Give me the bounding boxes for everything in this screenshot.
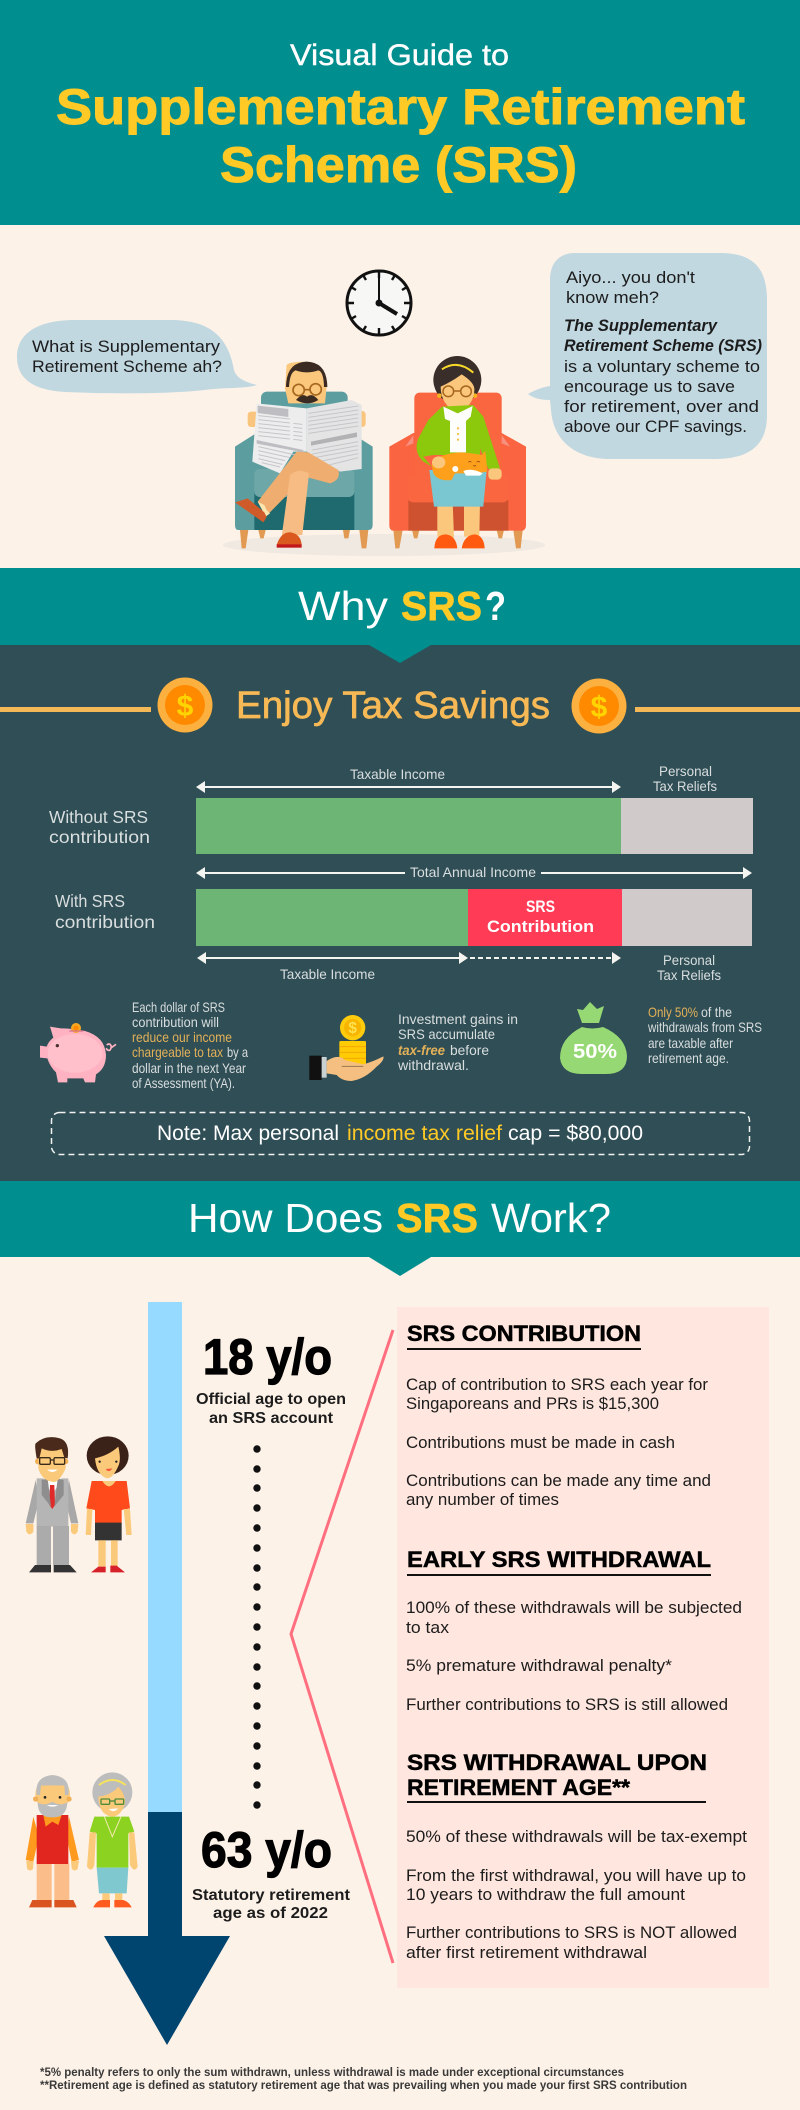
section: early SRS withdrawal: 100% of these withdrawals will be subjected [406,1598,742,1617]
callout: question bubble: What is Supplementary [32,337,221,356]
callout: answer bubble: above our CPF savings. [564,417,747,436]
section: early SRS withdrawal: to tax [406,1618,450,1637]
text: 63 y/o: 63 y/o [201,1822,332,1878]
text: 18 y/o [196,1329,346,1427]
arrow: band pointer [369,645,431,663]
callout: note on relief cap: cap = $80,000 [508,1122,643,1145]
icon: senior couple [26,1772,138,1907]
text: reduce income chargeable to tax: Each dollar of SRS [132,999,225,1015]
chart: income bar with SRS: Taxable Income [280,966,375,982]
text: investment gains tax-free: withdrawal. [397,1057,469,1073]
icon: young couple [26,1436,132,1572]
section: SRS contribution: Cap of contribution to SRS each year for [406,1375,708,1394]
arrow: total annual income [196,864,752,880]
heading band: how does srs work: How Does [188,1195,383,1241]
text: investment gains tax-free: before [450,1042,489,1058]
icon: hand holding gold coins [309,1015,384,1081]
panel: SRS rules [397,1307,769,1988]
heading: enjoy tax savings with coins: Enjoy Tax Savings [236,685,550,727]
chart: income bar without SRS: contribution [49,827,150,847]
text: 18 y/o: Official age to open [196,1391,346,1408]
heading: enjoy tax savings with coins [0,678,800,734]
text: 63 y/o [192,1822,351,1922]
chart: income bar without SRS [49,763,753,854]
arrow: timeline from 18 to 63 [104,1302,230,2045]
callout: note on relief cap: Note: Max personal [157,1122,339,1145]
callout: note on relief cap [52,1112,750,1154]
title: supplementary retirement scheme: Supplementary Retirement [56,79,745,135]
chart: income bar without SRS: Taxable Income [350,766,445,782]
icon: dotted timeline [253,1445,261,1809]
heading band: how does srs work [0,1181,800,1276]
icon: money bag 50%: 50% [573,1041,617,1063]
text: investment gains tax-free: SRS accumulate [398,1026,495,1042]
section: SRS contribution: Singaporeans and PRs is $15,300 [406,1394,659,1413]
icon: man reading newspaper on teal armchair [235,362,373,548]
section: SRS contribution: any number of times [406,1490,559,1509]
section: withdrawal upon retirement age [406,1750,747,1962]
chart: income bar with SRS: Tax Reliefs [657,967,721,983]
icon: bracket connecting timeline to details [291,1330,393,1963]
callout: answer bubble: is a voluntary scheme to [564,357,760,376]
text: 63 y/o: Statutory retirement [192,1887,351,1904]
callout: question bubble [17,320,257,393]
text: only 50% taxable: Only 50% [648,1004,698,1020]
section: early SRS withdrawal: Further contributions to SRS is still allowed [406,1695,728,1714]
section: SRS contribution [406,1321,711,1509]
text: reduce income chargeable to tax: reduce our income [132,1029,232,1045]
panel: tax savings [0,645,800,1181]
text: reduce income chargeable to tax: by a [227,1044,248,1060]
callout: question bubble: Retirement Scheme ah? [32,357,222,376]
text: reduce income chargeable to tax: of Assessment (YA). [132,1075,235,1091]
text: only 50% taxable [647,1004,762,1066]
icon: wall clock [347,271,411,335]
title: visual guide to: Visual Guide to [290,39,509,72]
section: withdrawal upon retirement age: SRS WITHDRAWAL UPON [407,1750,707,1775]
footnotes [40,2067,687,2092]
section: withdrawal upon retirement age: 50% of these withdrawals will be tax-exempt [406,1827,747,1846]
chart: income bar with SRS: SRS [526,897,555,916]
heading band: why srs: ? [485,583,506,629]
callout: answer bubble [528,253,767,459]
text: investment gains tax-free: Investment gains in [398,1011,518,1027]
text: 63 y/o: age as of 2022 [213,1905,328,1922]
footnotes: **Retirement age is defined as statutory retirement age that was prevailing when you made your first SRS contribution [40,2080,687,2092]
icon: floor shadow [223,534,545,556]
panel: title banner [0,0,800,225]
callout: answer bubble: The Supplementary [564,316,718,335]
text: only 50% taxable: retirement age. [648,1050,729,1066]
panel: timeline [26,1302,393,2045]
title: supplementary retirement scheme [56,79,745,193]
section: withdrawal upon retirement age: after first retirement withdrawal [406,1943,647,1962]
text: only 50% taxable: withdrawals from SRS [647,1019,762,1035]
heading band: why srs: SRS [401,583,482,629]
callout: answer bubble: Aiyo... you don't [566,268,695,287]
heading band: why srs: Why [298,583,389,629]
chart: income bar without SRS: Without SRS [49,807,148,827]
section: early SRS withdrawal [406,1547,742,1714]
chart: income bar with SRS: Personal [663,952,715,968]
callout: answer bubble: encourage us to save [564,377,735,396]
callout: note on relief cap: income tax relief [347,1122,502,1145]
heading band: why srs [0,568,800,645]
section: withdrawal upon retirement age: 10 years to withdraw the full amount [406,1885,685,1904]
text: investment gains tax-free [397,1011,518,1073]
text: reduce income chargeable to tax: dollar in the next Year [132,1060,246,1076]
icon: hand holding gold coins: $ [348,1020,357,1037]
chart: income bar with SRS: contribution [55,912,155,932]
section: SRS contribution: Contributions can be made any time and [406,1471,711,1490]
text: only 50% taxable: of the [701,1004,732,1020]
section: withdrawal upon retirement age: From the first withdrawal, you will have up to [406,1866,746,1885]
icon: woman with cat on orange armchair [389,356,526,548]
callout: answer bubble: for retirement, over and [564,397,759,416]
heading band: how does srs work: SRS [396,1195,478,1241]
chart: income bar without SRS: Personal [659,763,712,779]
chart: income bar with SRS: With SRS [55,891,125,911]
text: only 50% taxable: are taxable after [648,1035,733,1051]
title: supplementary retirement scheme: Scheme (SRS) [220,137,577,193]
section: withdrawal upon retirement age: RETIREMENT AGE** [407,1775,630,1800]
arrow: total annual income: Total Annual Income [410,864,536,880]
heading: enjoy tax savings with coins: $ [591,691,608,724]
text: 18 y/o: an SRS account [209,1410,334,1427]
text: reduce income chargeable to tax: chargeable to tax [132,1044,223,1060]
callout: answer bubble: Retirement Scheme (SRS) [564,336,762,355]
chart: income bar without SRS: Tax Reliefs [653,778,717,794]
panel: couple conversation scene [17,253,767,556]
text: 18 y/o: 18 y/o [203,1329,332,1385]
chart: income bar with SRS: Contribution [487,917,594,936]
text: investment gains tax-free: tax-free [398,1042,445,1058]
icon: piggy bank [40,1023,116,1082]
section: SRS contribution: SRS CONTRIBUTION [407,1321,641,1346]
callout: answer bubble: know meh? [566,288,659,307]
icon: money bag 50% [560,1002,627,1074]
text: reduce income chargeable to tax [132,999,248,1091]
heading band: how does srs work: Work? [491,1195,611,1241]
section: early SRS withdrawal: EARLY SRS WITHDRAWAL [407,1547,711,1572]
text: reduce income chargeable to tax: contribution will [132,1014,219,1030]
chart: income bar with SRS [55,889,752,983]
footnotes: *5% penalty refers to only the sum withdrawn, unless withdrawal is made under exceptional circumstances [40,2067,624,2079]
section: SRS contribution: Contributions must be made in cash [406,1433,675,1452]
section: withdrawal upon retirement age: Further contributions to SRS is NOT allowed [406,1923,737,1942]
section: early SRS withdrawal: 5% premature withdrawal penalty* [406,1656,672,1675]
heading: enjoy tax savings with coins: $ [177,690,194,723]
